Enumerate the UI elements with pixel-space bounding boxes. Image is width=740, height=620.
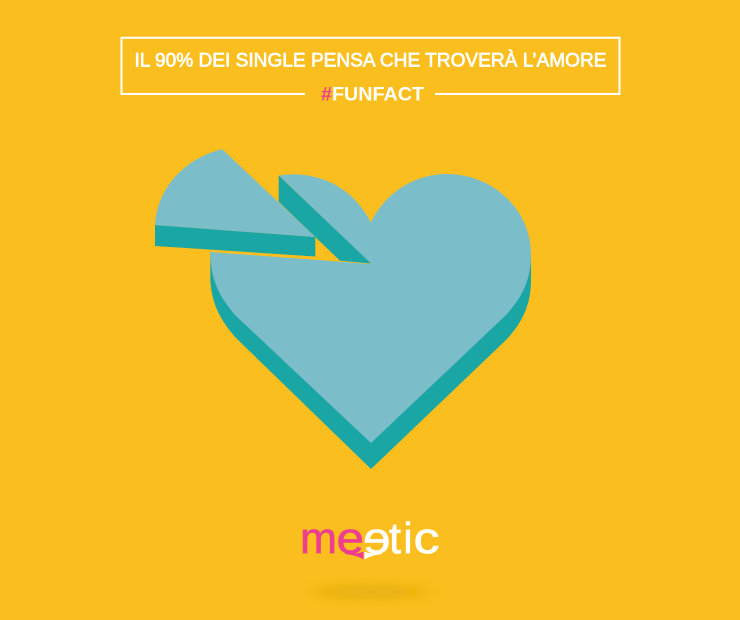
logo heart tail pink bbox=[345, 551, 364, 560]
removed slice top bbox=[155, 149, 315, 237]
logo shadow bbox=[308, 586, 432, 598]
heart top face bbox=[210, 174, 531, 443]
logo letter i: i bbox=[404, 514, 412, 563]
logo letter t: t bbox=[389, 514, 401, 563]
hashtag: #FUNFACT bbox=[321, 84, 424, 106]
logo: meetic bbox=[300, 514, 440, 563]
heart chart: 90% heart with slice removed bbox=[155, 149, 531, 469]
logo letter c: c bbox=[414, 514, 440, 563]
logo pink letter e: e bbox=[336, 514, 364, 563]
heading: IL 90% DEI SINGLE PENSA CHE TROVERÀ L’AMORE bbox=[134, 48, 606, 72]
removed slice side bbox=[155, 225, 315, 256]
logo pink letter m: m bbox=[300, 514, 337, 563]
inner cut wall bbox=[279, 176, 371, 264]
logo heart tail white bbox=[364, 551, 382, 560]
title box bbox=[122, 38, 620, 106]
logo mirrored e: e bbox=[363, 514, 390, 563]
heart 3D side bbox=[210, 252, 531, 469]
